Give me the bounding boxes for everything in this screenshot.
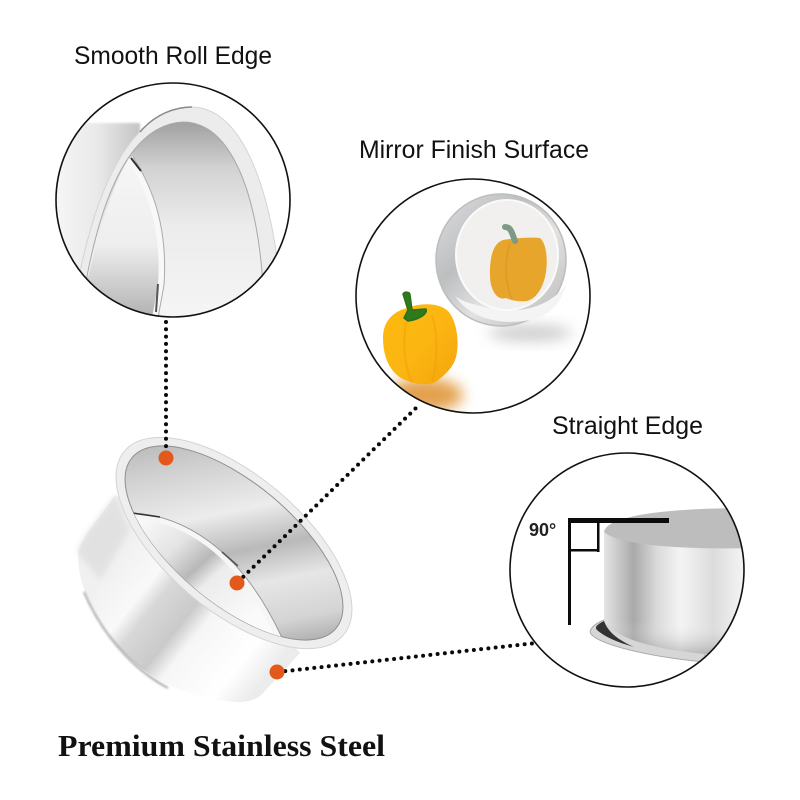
title: Smooth Roll Edge: Smooth Roll Edge bbox=[74, 42, 272, 70]
title: Straight Edge: Straight Edge bbox=[552, 412, 703, 440]
floor under interior edge bbox=[88, 160, 158, 314]
panel: straight edge diagram bbox=[510, 453, 760, 687]
right angle marker bbox=[568, 518, 669, 625]
mirror pan rim bbox=[436, 194, 566, 326]
mirror pan surface bbox=[456, 200, 558, 310]
pepper shadow bbox=[387, 378, 463, 412]
title: Premium Stainless Steel: Premium Stainless Steel bbox=[58, 728, 385, 763]
base flange bbox=[590, 620, 705, 662]
marker: roll edge bbox=[158, 450, 174, 466]
dotted leader: roll edge bbox=[164, 322, 168, 456]
90 degree label: 90° bbox=[529, 520, 556, 540]
panel: mirror finish surface bbox=[356, 179, 590, 413]
pan outer body bbox=[78, 495, 300, 702]
pepper stem bbox=[403, 292, 426, 321]
pan inner wall bbox=[94, 412, 374, 674]
reflected pepper bbox=[490, 227, 547, 301]
dotted leader: mirror surface bbox=[238, 405, 419, 582]
marker: mirror surface bbox=[230, 576, 244, 590]
inner edge highlight bbox=[130, 158, 162, 318]
panel: smooth roll edge close-up bbox=[50, 83, 290, 330]
pan inner floor bbox=[134, 512, 282, 637]
pan shadow bbox=[488, 325, 572, 341]
cake pan wall bbox=[604, 532, 743, 654]
pan interior bbox=[87, 122, 262, 330]
roll rim bbox=[80, 106, 276, 274]
pan rim bbox=[81, 399, 387, 687]
main stainless steel pan bbox=[78, 436, 352, 702]
outer pan wall bbox=[57, 122, 141, 270]
top rim shadow bbox=[140, 107, 192, 132]
cake pan top bbox=[604, 508, 742, 548]
dotted leader: straight edge bbox=[278, 643, 536, 672]
yellow pepper bbox=[383, 304, 458, 384]
marker: straight edge bbox=[270, 664, 284, 680]
title: Mirror Finish Surface: Mirror Finish Surface bbox=[359, 136, 589, 164]
